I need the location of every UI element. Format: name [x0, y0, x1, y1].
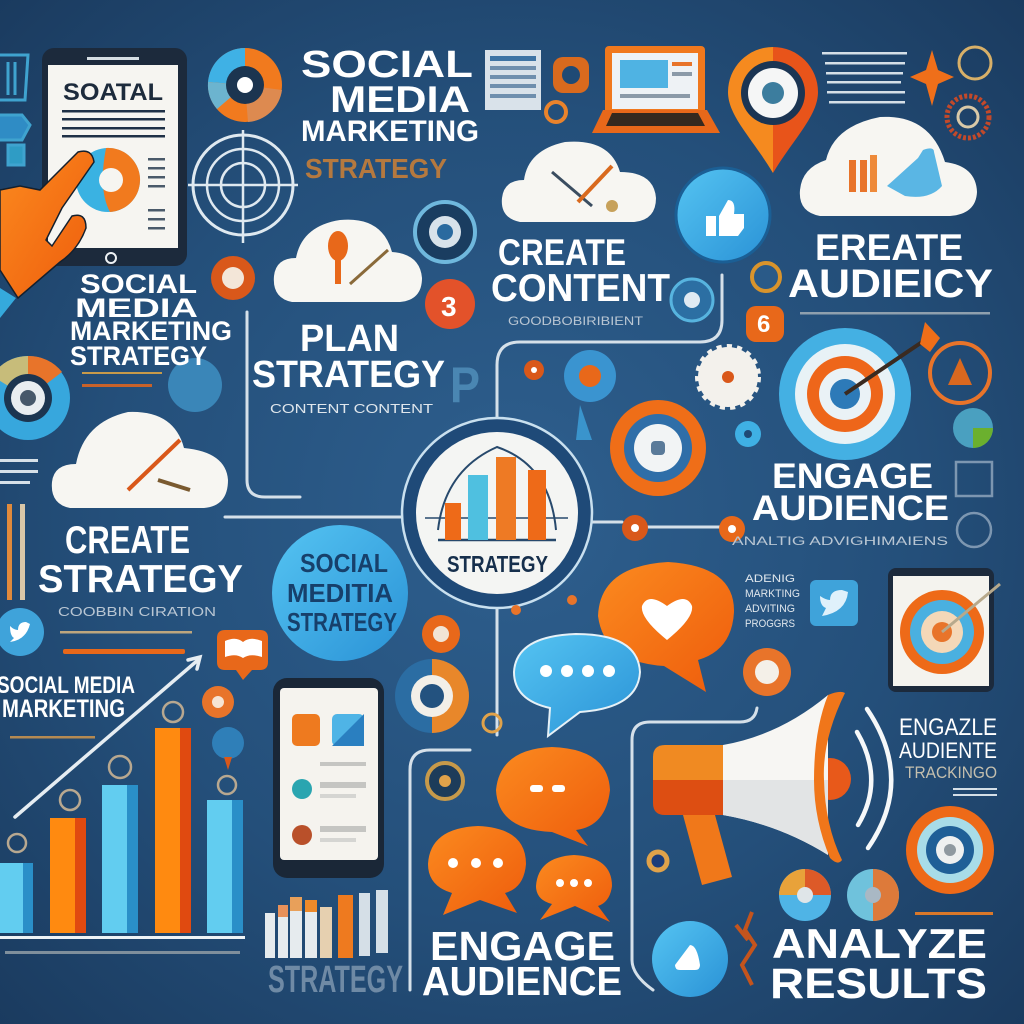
text block: engage audience tracking: AUDIENTE: [899, 738, 997, 763]
badge: social media strategy: STRATEGY: [287, 607, 397, 637]
text block: engage audience tracking: [899, 714, 997, 796]
icon: top-left small emblems: [0, 55, 30, 165]
icon: blue badge: [671, 279, 713, 321]
caption: good content: GOODBOBIRIBIENT: [508, 314, 644, 328]
icon: tablet with target and arrow: [888, 568, 1000, 692]
icon: right document: [956, 462, 992, 547]
heading: create audience: EREATE: [815, 227, 963, 268]
hub: central strategy chart: STRATEGY: [447, 551, 548, 577]
icon: orange ball: [743, 648, 791, 696]
icon: left donut: [0, 356, 70, 440]
icon: smartphone: [273, 678, 384, 878]
icon: orange chat bubble small left: [428, 826, 526, 915]
icon: cloud with brush (plan strategy): [274, 220, 422, 302]
icon: target reticle: [188, 130, 298, 243]
heading: plan strategy: PLAN: [300, 318, 399, 360]
heading: create strategy: STRATEGY: [38, 558, 243, 601]
icon: blue globe near chart: [212, 727, 244, 770]
icon: small dots: [524, 360, 761, 542]
heading: create strategy: [38, 519, 243, 601]
heading: create content: [491, 232, 670, 310]
icon: small ring: [752, 263, 780, 291]
mini bars: strategy: [265, 890, 403, 1001]
heading: engage audience right: ENGAGE: [772, 457, 933, 496]
icon: document list: [485, 50, 541, 110]
badge: social media strategy: [272, 525, 408, 661]
icon: left lines: [0, 459, 38, 484]
icon: orange star sparkle: [910, 50, 954, 106]
icon: blue speech bubble with dots: [514, 634, 640, 736]
heading: create content: CREATE: [498, 232, 626, 273]
heading: create audience: [788, 227, 993, 306]
heading: plan strategy: STRATEGY: [252, 354, 445, 396]
icon: megaphone: [653, 692, 851, 885]
heading: create content: CONTENT: [491, 267, 670, 310]
icon: orange chat tile: [217, 630, 268, 680]
icon: orange 6 badge: [746, 306, 784, 342]
icon: twitter circle: [0, 608, 44, 656]
heading: social media marketing left: SOCIAL MEDIA: [0, 672, 135, 699]
heading: left social media marketing strategy: STRATEGY: [70, 341, 207, 371]
icon: target rings small: [415, 202, 475, 262]
icon: orange badge with 3: 3: [441, 291, 457, 322]
caption: under target: [915, 912, 993, 915]
heading: left social media marketing strategy: MEDIA: [75, 293, 198, 323]
icon: orange ball near chart: [202, 686, 234, 718]
icon: orange badge with 3: [425, 279, 475, 329]
icon: orange chat bubble large: [496, 747, 610, 846]
heading: create audience: AUDIEICY: [788, 262, 993, 306]
icon: top-right small emblems: [947, 47, 991, 138]
text block: engage audience tracking: TRACKINGO: [905, 763, 997, 782]
icon: small orange circle: [546, 57, 589, 122]
icon: target bottom right: [906, 806, 994, 894]
icon: blue globe: [168, 358, 222, 412]
heading: plan strategy: [252, 318, 445, 396]
heading: engage audience right: AUDIENCE: [752, 489, 949, 528]
icon: small orange circle center: [422, 615, 460, 653]
icon: green blue ball: [953, 408, 993, 448]
text block: middle right caption: ADVITING: [745, 603, 795, 615]
icon: decorative orange cluster: [736, 912, 755, 985]
caption: coobin cration: COOBBIN CIRATION: [58, 604, 216, 619]
heading: social media marketing left: MARKETING: [2, 695, 125, 723]
caption: analytics advertisements: ANALTIG ADVIGHIMAIENS: [732, 534, 948, 548]
heading: left social media marketing strategy: MARKETING: [70, 316, 232, 346]
icon: orange pillar: [7, 504, 25, 600]
icon: small chart emblems: [8, 702, 236, 852]
connector lines: [225, 275, 757, 990]
icon: laptop: [592, 46, 720, 133]
heading: engage audience right: [752, 457, 949, 528]
text block: middle right caption: MARKTING: [745, 588, 800, 600]
icon: small badges: [427, 595, 577, 799]
icon: orange 6 badge: 6: [757, 311, 770, 338]
text block: engage audience tracking: ENGAZLE: [899, 714, 997, 741]
heading: engage audience bottom: [422, 923, 622, 1004]
heading: social media marketing left: [0, 672, 135, 723]
heading: left social media marketing strategy: SOCIAL: [80, 269, 197, 299]
heading: analyze results: [770, 920, 987, 1008]
icons: pie pair: [779, 869, 899, 921]
icon: central orange-blue target: [610, 400, 706, 496]
icon: sound waves: [857, 709, 891, 848]
heading: engage audience bottom: ENGAGE: [430, 923, 615, 969]
icon: faded letter p: P: [450, 357, 480, 413]
icon: orange ring center: [395, 659, 469, 733]
icon: small ring: [649, 852, 667, 870]
badge: social media strategy: SOCIAL: [300, 548, 388, 578]
icon: orange chat bubble small right: [536, 855, 612, 922]
icon: tablet with report: SOATAL: [63, 79, 163, 106]
arrow: growth trend: [15, 657, 200, 817]
text block: middle right caption: ADENIG: [745, 573, 795, 585]
icon: small lines above chart: [10, 631, 192, 738]
caption: tiny under audience: [800, 312, 990, 314]
title: SOCIAL: [301, 44, 473, 86]
icon: pointing hand: [0, 151, 94, 318]
hub: central strategy chart: [402, 418, 592, 608]
icon: donut chart top: [208, 48, 282, 122]
icon: cloud with charts (audience): [800, 117, 977, 216]
icon: target with arrow: [779, 322, 940, 460]
caption: content content: CONTENT CONTENT: [270, 401, 433, 416]
title: STRATEGY: [305, 153, 447, 184]
text block: middle right caption: PROGGRS: [745, 618, 795, 630]
icon: hex badge: [564, 350, 616, 402]
icon: gear: [698, 347, 758, 407]
heading: left social media marketing strategy: [70, 269, 232, 387]
mini bars: strategy: STRATEGY: [268, 959, 403, 1001]
icon: cloud with tools (create content): [502, 142, 656, 222]
heading: create strategy: CREATE: [65, 519, 190, 562]
icon: text lines top right: [822, 52, 907, 104]
icon: twitter-like tile: [810, 580, 858, 626]
icon: cloud with arrow (create strategy): [52, 412, 228, 508]
bar chart: growth: [0, 728, 245, 939]
heading: analyze results: RESULTS: [770, 960, 987, 1008]
icon: blue thumb circle: [676, 168, 770, 262]
heading: analyze results: ANALYZE: [772, 920, 987, 967]
icon: orange ring: [211, 256, 255, 300]
icon: location pin: [728, 47, 818, 173]
icon: tablet with report: [42, 48, 187, 266]
caption line under chart: [5, 951, 240, 954]
icon: blue thumb circle bottom: [652, 921, 728, 997]
title: MARKETING: [301, 115, 479, 148]
icon: orange ring right: [930, 343, 990, 403]
heading: engage audience bottom: AUDIENCE: [422, 958, 622, 1004]
badge: social media strategy: MEDITIA: [287, 578, 393, 608]
title: MEDIA: [330, 79, 470, 120]
icon: orange speech bubble with heart: [598, 562, 734, 692]
text block: middle right caption: [745, 573, 800, 630]
title: [301, 44, 479, 184]
